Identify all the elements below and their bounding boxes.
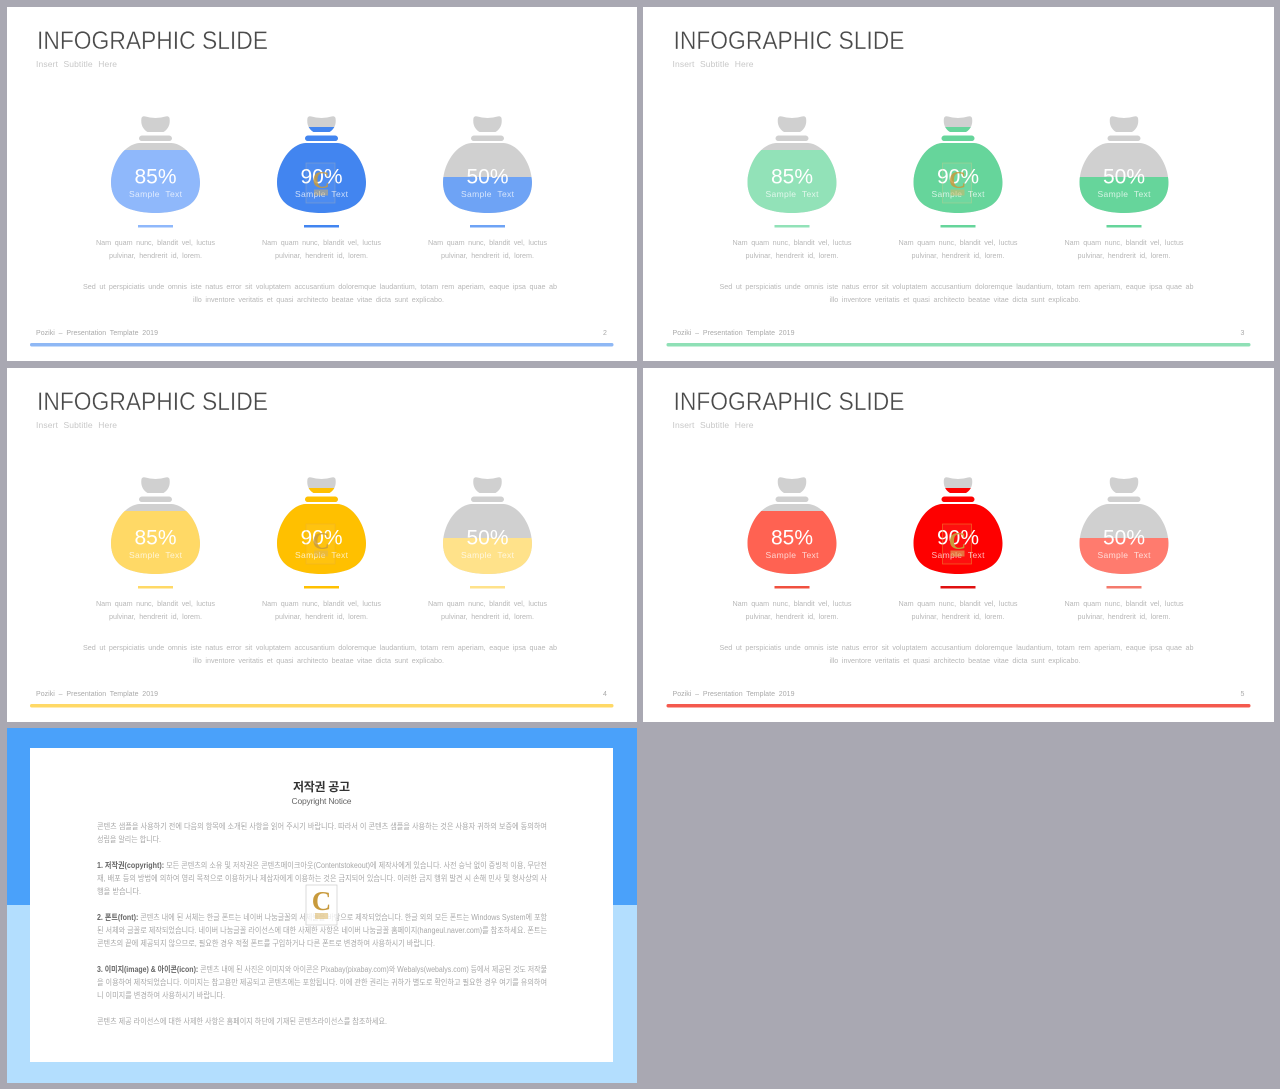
- bag chart: 85%: Sample Text: [766, 550, 819, 560]
- bag chart: 85%: Nam quam nunc, blandit vel, luctus: [96, 238, 215, 247]
- footer: [672, 330, 1244, 337]
- section 2: font: [97, 912, 548, 948]
- bag chart: 50%: Sample Text: [1098, 550, 1151, 560]
- section 1: copyright: 1. 저작권(copyright): 모든 콘텐츠의 소유 및 저작권은 콘텐츠메이크아웃(Contentstokeout)에 제작사에게 있습니다. 사전 승낙 없이 증빙적 이용, 무단전: [97, 860, 547, 870]
- footer: [672, 691, 1244, 698]
- bag chart: 50%: Sample Text: [1098, 189, 1151, 199]
- watermark: C: [312, 529, 330, 555]
- bag chart: 50%: 50%: [466, 526, 508, 550]
- copyright heading: 저작권 공고: [293, 779, 350, 794]
- title: INFOGRAPHIC SLIDE: [674, 27, 904, 55]
- bag chart: 85%: Nam quam nunc, blandit vel, luctus: [96, 599, 215, 608]
- footer: 4: [603, 691, 607, 698]
- watermark: [942, 524, 972, 564]
- body text: Sed ut perspiciatis unde omnis iste natus error sit voluptatem accusantium doloremque laudantium, totam rem aperiam, eaque ipsa quae ab: [83, 282, 557, 291]
- watermark: [942, 163, 972, 203]
- bag chart: 85%: [96, 477, 215, 621]
- bag chart: 90%: Sample Text: [932, 189, 985, 199]
- subtitle: Insert Subtitle Here: [36, 420, 117, 430]
- footer: [36, 330, 607, 337]
- bag chart: 50%: 50%: [1103, 166, 1145, 188]
- watermark: C: [312, 886, 331, 916]
- footer: 2: [603, 330, 607, 337]
- section 1: copyright: 재, 배포 등의 방법에 의하여 영리 목적으로 이용하거나 제삼자에게 이용하는 것은 금지되어 있습니다. 이러한 금지 행위 발견 시 손해 민사 및 형사상의 사: [97, 873, 548, 883]
- bag chart: 85%: [732, 116, 852, 260]
- footer: [36, 691, 607, 698]
- bag chart: 85%: 85%: [134, 166, 176, 188]
- bag chart: 85%: pulvinar, hendrerit id, lorem.: [746, 612, 838, 621]
- bag chart: 50%: [1064, 116, 1184, 260]
- panel: green slide: [643, 7, 1274, 361]
- footer: 5: [1240, 691, 1244, 698]
- panel: blue slide: [7, 7, 637, 361]
- section 2: font: 콘텐츠의 끝에 제공되지 않으므로, 필요한 경우 적절 폰트를 구입하거나 다른 폰트로 변경하여 사용하시기 바랍니다.: [97, 938, 435, 948]
- footer bar: [666, 704, 1250, 708]
- bag chart: 85%: Sample Text: [766, 189, 819, 199]
- bag chart: 90%: 90%: [937, 526, 979, 550]
- bag chart: 90%: [262, 116, 381, 260]
- body text: illo inventore veritatis et quasi architecto beatae vitae dicta sunt explicabo.: [193, 656, 444, 665]
- intro text: 콘텐츠 샘플을 사용하기 전에 다음의 항목에 소개된 사항을 읽어 주시기 바랍니다. 따라서 이 콘텐츠 샘플을 사용하는 것은 사용자 귀하의 보증에 동의하여: [97, 821, 547, 831]
- watermark: [306, 163, 335, 203]
- panel: red slide: [643, 368, 1274, 722]
- license note: 콘텐츠 제공 라이선스에 대한 사제한 사항은 홈페이지 하단에 기재된 콘텐츠라이선스를 참조하세요.: [97, 1016, 387, 1026]
- bag chart: 90%: 90%: [937, 166, 979, 188]
- watermark: [306, 885, 337, 925]
- bag chart: 50%: Nam quam nunc, blandit vel, luctus: [1064, 599, 1184, 608]
- body text: [720, 643, 1194, 665]
- body text: [83, 643, 557, 665]
- intro text: [97, 821, 547, 844]
- bag chart: 50%: pulvinar, hendrerit id, lorem.: [441, 251, 534, 260]
- footer: 3: [1240, 330, 1244, 337]
- bag chart: 50%: pulvinar, hendrerit id, lorem.: [1078, 251, 1170, 260]
- body text: [720, 282, 1194, 304]
- bag chart: 50%: [1064, 477, 1184, 621]
- section 3: image and icon: 3. 이미지(image) & 아이콘(icon): 콘텐츠 내에 된 사진은 이미지와 아이콘은 Pixabay(pixabay.com)와 Webalys(webalys.com) 등에서 제공된 것도 저작물: [97, 964, 547, 974]
- copyright subheading: Copyright Notice: [292, 796, 352, 806]
- title: INFOGRAPHIC SLIDE: [674, 388, 904, 416]
- bag chart: 85%: 85%: [134, 526, 176, 550]
- subtitle: Insert Subtitle Here: [672, 59, 754, 69]
- body text: Sed ut perspiciatis unde omnis iste natus error sit voluptatem accusantium doloremque laudantium, totam rem aperiam, eaque ipsa quae ab: [83, 643, 557, 652]
- title: INFOGRAPHIC SLIDE: [37, 388, 268, 416]
- watermark: C: [949, 529, 966, 555]
- bag chart: 90%: pulvinar, hendrerit id, lorem.: [912, 612, 1004, 621]
- section 1: copyright: 행을 받습니다.: [97, 886, 141, 896]
- footer: Poziki – Presentation Template 2019: [672, 330, 795, 337]
- bag chart: 50%: Nam quam nunc, blandit vel, luctus: [428, 238, 547, 247]
- body text: illo inventore veritatis et quasi architecto beatae vitae dicta sunt explicabo.: [830, 295, 1080, 304]
- bag chart: 85%: 85%: [771, 166, 813, 188]
- bag chart: 85%: pulvinar, hendrerit id, lorem.: [746, 251, 838, 260]
- bag chart: 90%: pulvinar, hendrerit id, lorem.: [275, 251, 368, 260]
- bag chart: 85%: pulvinar, hendrerit id, lorem.: [109, 251, 202, 260]
- section 3: image and icon: 니 이미지를 변경하여 사용하시기 바랍니다.: [97, 990, 225, 1000]
- bag chart: 50%: Nam quam nunc, blandit vel, luctus: [428, 599, 547, 608]
- footer bar: [666, 343, 1250, 346]
- bag chart: 90%: pulvinar, hendrerit id, lorem.: [275, 612, 368, 621]
- bag chart: 85%: [96, 116, 215, 260]
- bag chart: 90%: Sample Text: [295, 189, 349, 199]
- bag chart: 90%: Sample Text: [932, 550, 985, 560]
- footer: Poziki – Presentation Template 2019: [36, 691, 158, 698]
- bag chart: 85%: Nam quam nunc, blandit vel, luctus: [732, 238, 852, 247]
- body text: illo inventore veritatis et quasi architecto beatae vitae dicta sunt explicabo.: [830, 656, 1080, 665]
- bag chart: 85%: Sample Text: [129, 550, 183, 560]
- bag chart: 50%: [428, 116, 547, 260]
- body text: illo inventore veritatis et quasi architecto beatae vitae dicta sunt explicabo.: [193, 295, 444, 304]
- body text: [83, 282, 557, 304]
- footer bar: [30, 343, 614, 346]
- bag chart: 90%: [898, 477, 1018, 621]
- bag chart: 90%: 90%: [300, 526, 342, 550]
- bag chart: 50%: 50%: [466, 166, 508, 188]
- section 3: image and icon: [97, 964, 547, 1000]
- body text: Sed ut perspiciatis unde omnis iste natus error sit voluptatem accusantium doloremque laudantium, totam rem aperiam, eaque ipsa quae ab: [720, 643, 1194, 652]
- footer bar: [30, 704, 614, 708]
- watermark: C: [949, 168, 966, 194]
- bag chart: 90%: Nam quam nunc, blandit vel, luctus: [262, 599, 381, 608]
- bag chart: 50%: Nam quam nunc, blandit vel, luctus: [1064, 238, 1184, 247]
- title: INFOGRAPHIC SLIDE: [37, 27, 268, 55]
- panel: yellow slide: [7, 368, 637, 722]
- body text: Sed ut perspiciatis unde omnis iste natus error sit voluptatem accusantium doloremque laudantium, totam rem aperiam, eaque ipsa quae ab: [720, 282, 1194, 291]
- section 2: font: 2. 폰트(font): 콘텐츠 내에 된 서체는 한글 폰트는 네이버 나눔글꼴의 서체들을 바탕으로 제작되었습니다. 한글 외의 모든 폰트는 Windows System에 포함: [97, 912, 548, 922]
- bag chart: 50%: 50%: [1103, 526, 1145, 550]
- section 3: image and icon: 을 이용하여 제작되었습니다. 이미지는 참고용만 제공되고 콘텐츠에는 포함됩니다. 이에 관한 권리는 귀하가 별도로 확인하고 필요한 경우 여기를 유의하여: [97, 977, 547, 987]
- bag chart: 85%: 85%: [771, 526, 813, 550]
- bag chart: 90%: Nam quam nunc, blandit vel, luctus: [262, 238, 381, 247]
- bag chart: 85%: pulvinar, hendrerit id, lorem.: [109, 612, 202, 621]
- bag chart: 50%: Sample Text: [461, 550, 515, 560]
- bag chart: 90%: [262, 477, 381, 621]
- bag chart: 50%: pulvinar, hendrerit id, lorem.: [441, 612, 534, 621]
- bag chart: 90%: Sample Text: [295, 550, 349, 560]
- bag chart: 90%: [898, 116, 1018, 260]
- bag chart: 90%: Nam quam nunc, blandit vel, luctus: [898, 599, 1018, 608]
- bag chart: 50%: pulvinar, hendrerit id, lorem.: [1078, 612, 1170, 621]
- bag chart: 90%: pulvinar, hendrerit id, lorem.: [912, 251, 1004, 260]
- watermark: C: [312, 168, 330, 194]
- intro text: 성립을 알리는 합니다.: [97, 834, 161, 844]
- bag chart: 50%: [428, 477, 547, 621]
- footer: Poziki – Presentation Template 2019: [36, 330, 158, 337]
- section 1: copyright: [97, 860, 548, 896]
- watermark: [306, 524, 335, 564]
- bag chart: 85%: Nam quam nunc, blandit vel, luctus: [732, 599, 852, 608]
- subtitle: Insert Subtitle Here: [672, 420, 754, 430]
- footer: Poziki – Presentation Template 2019: [672, 691, 795, 698]
- panel: copyright notice: [7, 728, 637, 1083]
- subtitle: Insert Subtitle Here: [36, 59, 117, 69]
- section 2: font: 된 서체와 글꼴로 제작되었습니다. 네이버 나눔글꼴 라이선스에 대한 사제한 사항은 네이버 나눔글꼴 홈페이지(hangeul.naver.com)를 참조하세요. 폰트는: [97, 925, 547, 935]
- bag chart: 85%: Sample Text: [129, 189, 183, 199]
- bag chart: 90%: 90%: [300, 166, 342, 188]
- bag chart: 85%: [732, 477, 852, 621]
- bag chart: 90%: Nam quam nunc, blandit vel, luctus: [898, 238, 1018, 247]
- bag chart: 50%: Sample Text: [461, 189, 515, 199]
